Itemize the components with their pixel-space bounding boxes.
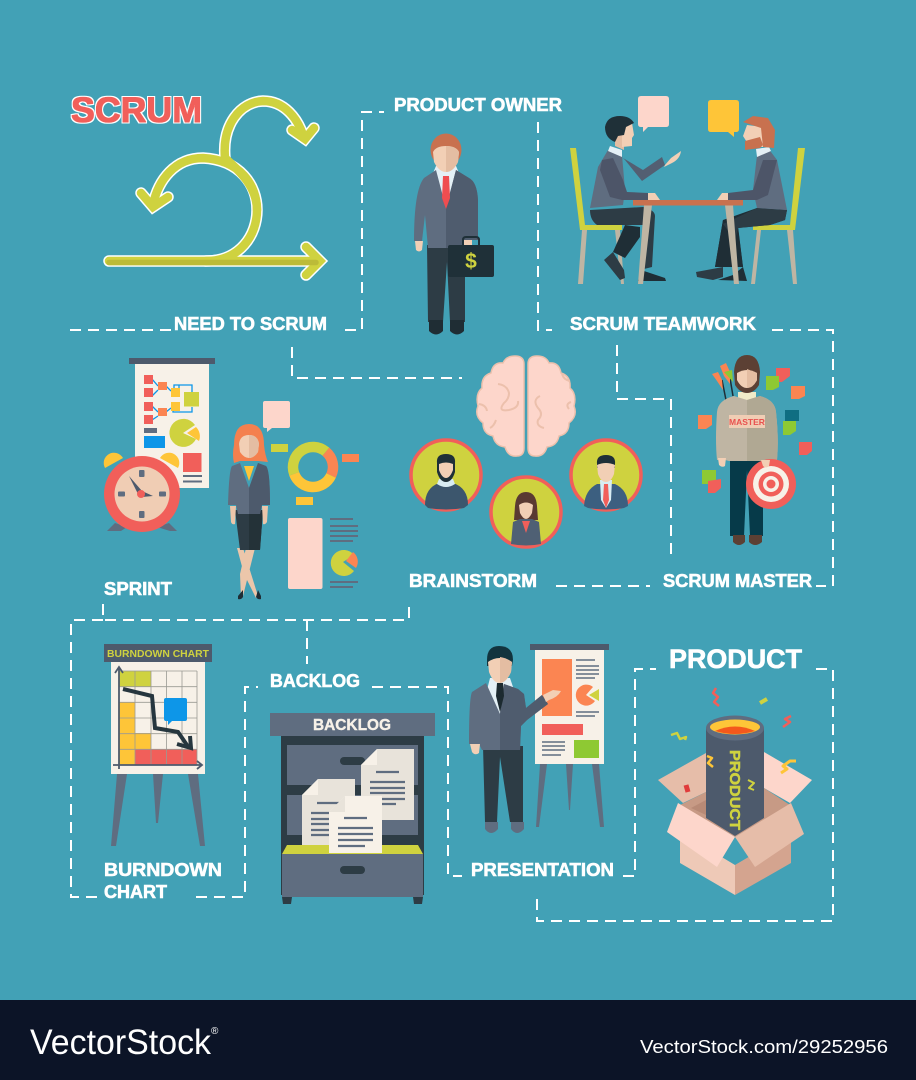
registered mark: ® [211, 1026, 219, 1037]
label: scrum teamwork: SCRUM TEAMWORK [570, 314, 756, 334]
chart: burndown chart on easel [104, 644, 212, 846]
speech bubble: yellow [708, 100, 739, 137]
documents [302, 749, 414, 851]
illustration: presentation board [530, 644, 609, 827]
icon: brain [477, 356, 575, 456]
arrows quiver [712, 363, 733, 400]
label: burndown chart: CHART [104, 882, 167, 902]
title: SCRUM: SCRUM [71, 91, 202, 130]
figure: scrum master with target: MASTER [729, 417, 765, 427]
sticky notes [698, 368, 812, 493]
illustration: product box with tube and confetti [658, 688, 812, 895]
speech bubble: pink [638, 96, 669, 132]
back flaps [658, 753, 706, 803]
label: scrum master: SCRUM MASTER [663, 571, 812, 591]
confetti [671, 688, 796, 792]
figure: product owner with briefcase: $ [465, 250, 477, 273]
left chair [570, 148, 624, 284]
chart: pink panel with pie and text lines [288, 518, 358, 589]
box front [680, 832, 735, 895]
chart: donut with legend bars [271, 444, 359, 505]
right person [696, 116, 787, 281]
chart: burndown chart on easel: BURNDOWN CHART [107, 649, 209, 660]
footer url: VectorStock.com/29252956 [640, 1036, 888, 1057]
figure: presenter man [469, 646, 561, 833]
front document [329, 796, 382, 853]
label: product owner: PRODUCT OWNER [394, 95, 562, 115]
right chair [751, 148, 805, 284]
avatar: woman [491, 477, 561, 547]
label: burndown chart [104, 860, 222, 902]
figure: scrum teamwork meeting [570, 96, 805, 284]
figure: woman presenter [228, 401, 290, 599]
illustration: backlog cabinet [270, 713, 435, 904]
tube: PRODUCT [726, 750, 743, 830]
label: presentation: PRESENTATION [471, 860, 614, 880]
figure: scrum master with target [698, 355, 812, 545]
speech bubble [164, 698, 187, 725]
dashed connectors between sections [70, 112, 833, 921]
label: backlog: BACKLOG [270, 671, 360, 691]
icon: scrum cycle arrows [109, 101, 320, 275]
illustration: backlog cabinet: BACKLOG [313, 717, 391, 734]
label: burndown chart: BURNDOWN [104, 860, 222, 880]
label: product: PRODUCT [669, 644, 802, 674]
figure: product owner with briefcase [414, 134, 494, 334]
avatar: man in suit [571, 440, 641, 510]
left person [590, 116, 681, 281]
table [633, 200, 743, 284]
label: brainstorm: BRAINSTORM [409, 571, 537, 591]
label: sprint: SPRINT [104, 579, 172, 599]
illustration: sprint flip chart [129, 358, 215, 488]
tube [706, 716, 764, 836]
speech bubble [263, 401, 290, 432]
icon: alarm clock [104, 453, 180, 532]
target [746, 459, 796, 509]
label: need to scrum: NEED TO SCRUM [174, 314, 327, 334]
avatar: bearded man [411, 440, 481, 510]
footer bar [0, 1000, 916, 1080]
footer logo text: VectorStock [30, 1023, 211, 1062]
